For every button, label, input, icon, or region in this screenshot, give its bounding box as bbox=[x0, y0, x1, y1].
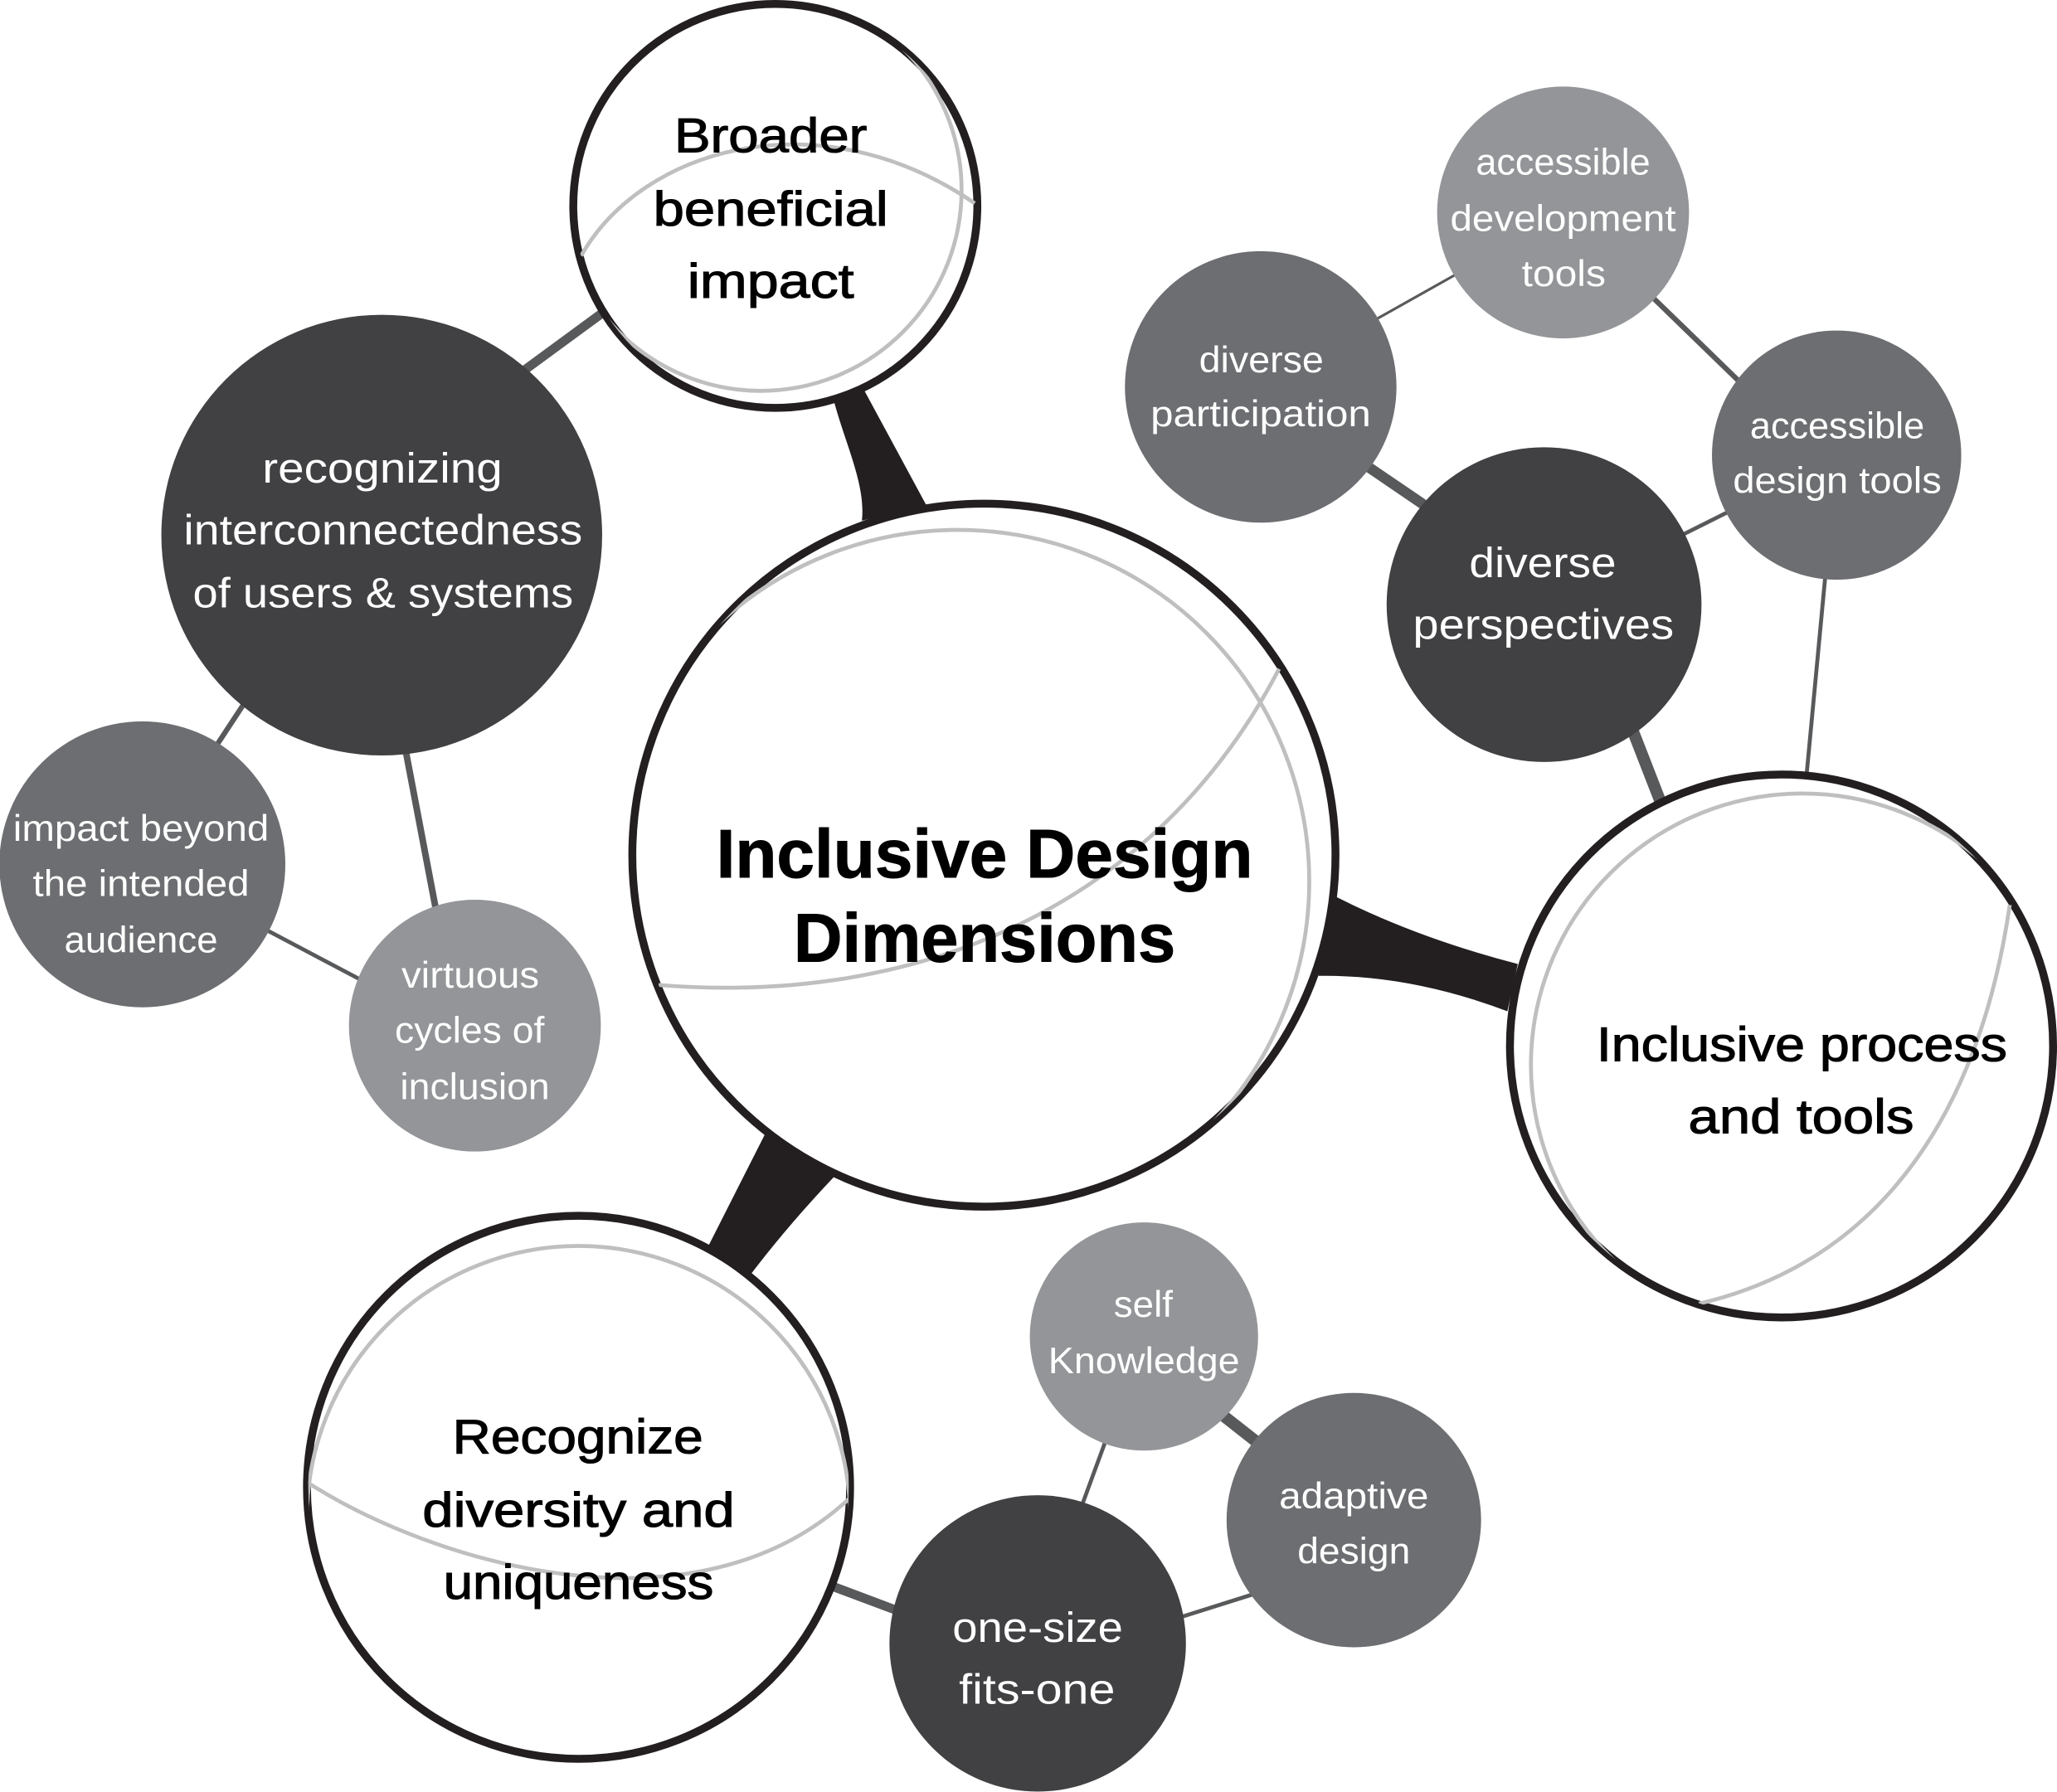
node: diverse perspectives bbox=[1387, 447, 1701, 762]
connector: development tools to design tools bbox=[1651, 295, 1741, 383]
connector: one-size to adaptive bbox=[1180, 1594, 1256, 1617]
node: accessible design tools: design tools bbox=[1733, 461, 1942, 502]
node: diverse participation: participation bbox=[1150, 394, 1371, 435]
node: adaptive design bbox=[1227, 1393, 1481, 1648]
node: recognizing interconnectedness: of users & systems bbox=[192, 569, 573, 616]
node: virtuous cycles of inclusion: inclusion bbox=[400, 1066, 550, 1107]
node: self knowledge: self bbox=[1114, 1285, 1174, 1325]
panel: recognize diversity and uniqueness: diversity and bbox=[422, 1484, 735, 1537]
connector: interconnectedness to impact beyond bbox=[215, 702, 246, 748]
node: impact beyond the intended audience: audience bbox=[65, 920, 218, 960]
connector: design tools to process and tools bbox=[1807, 575, 1826, 776]
node: impact beyond the intended audience bbox=[0, 721, 285, 1008]
node: adaptive design: design bbox=[1297, 1531, 1410, 1571]
connector: participation to perspectives bbox=[1369, 467, 1426, 507]
connector: broader impact to interconnectedness bbox=[525, 312, 604, 370]
connector: centre to recognize diversity bbox=[708, 1134, 834, 1275]
connector: one-size to self knowledge bbox=[1082, 1440, 1106, 1504]
panel: centre circle: Inclusive Design bbox=[717, 817, 1252, 892]
panel: centre circle bbox=[606, 503, 1335, 1233]
panel: centre circle: Dimensions bbox=[794, 901, 1175, 976]
panel: broader beneficial impact: Broader bbox=[674, 109, 867, 163]
panel: recognize diversity and uniqueness bbox=[307, 1216, 850, 1789]
node: diverse perspectives: perspectives bbox=[1413, 600, 1674, 648]
connector: self knowledge to adaptive bbox=[1223, 1416, 1259, 1444]
connector: centre to broader impact bbox=[834, 391, 926, 521]
node: self knowledge: Knowledge bbox=[1048, 1341, 1240, 1382]
connector: interconnectedness to virtuous cycles bbox=[406, 749, 435, 907]
node: virtuous cycles of inclusion bbox=[349, 900, 601, 1152]
connector: impact beyond to virtuous cycles bbox=[266, 930, 361, 979]
node: accessible design tools bbox=[1712, 331, 1962, 580]
node: accessible design tools: accessible bbox=[1750, 406, 1924, 446]
node: adaptive design: adaptive bbox=[1279, 1476, 1428, 1517]
node: self knowledge bbox=[1030, 1222, 1258, 1450]
panel: recognize diversity and uniqueness: Recognize bbox=[453, 1410, 703, 1464]
panel: inclusive process and tools: Inclusive process bbox=[1597, 1018, 2007, 1072]
panel: broader beneficial impact bbox=[560, 0, 977, 408]
node: diverse participation: diverse bbox=[1199, 340, 1324, 381]
node: one-size fits-one bbox=[889, 1495, 1186, 1792]
node: one-size fits-one: fits-one bbox=[959, 1666, 1115, 1713]
connector: recognize diversity to one-size bbox=[834, 1587, 897, 1610]
node: recognizing interconnectedness bbox=[162, 315, 602, 755]
node: accessible development tools: accessible bbox=[1476, 142, 1651, 182]
panel: broader beneficial impact: beneficial bbox=[654, 182, 888, 236]
connector: perspectives to process and tools bbox=[1633, 732, 1661, 803]
panel: inclusive process and tools bbox=[1510, 775, 2057, 1337]
node: recognizing interconnectedness: recognizing bbox=[262, 444, 503, 492]
connector: perspectives to design tools bbox=[1682, 510, 1732, 535]
panel: recognize diversity and uniqueness: uniqueness bbox=[444, 1556, 713, 1610]
node: accessible development tools: tools bbox=[1522, 254, 1606, 294]
panel: inclusive process and tools: and tools bbox=[1689, 1090, 1914, 1144]
node: virtuous cycles of inclusion: cycles of bbox=[395, 1010, 545, 1051]
connector: participation to development tools bbox=[1375, 273, 1459, 320]
node: impact beyond the intended audience: the intended bbox=[33, 863, 250, 904]
panel: broader beneficial impact: impact bbox=[688, 255, 854, 308]
node: one-size fits-one: one-size bbox=[952, 1604, 1123, 1651]
node: accessible development tools: development bbox=[1450, 198, 1676, 239]
connector: centre to process and tools bbox=[1319, 897, 1518, 1011]
node: virtuous cycles of inclusion: virtuous bbox=[401, 955, 539, 996]
node: diverse perspectives: diverse bbox=[1469, 539, 1617, 586]
node: accessible development tools bbox=[1437, 86, 1689, 338]
node: impact beyond the intended audience: impact beyond bbox=[13, 809, 269, 849]
node: diverse participation bbox=[1125, 251, 1397, 522]
node: recognizing interconnectedness: interconnectedness bbox=[183, 506, 582, 553]
